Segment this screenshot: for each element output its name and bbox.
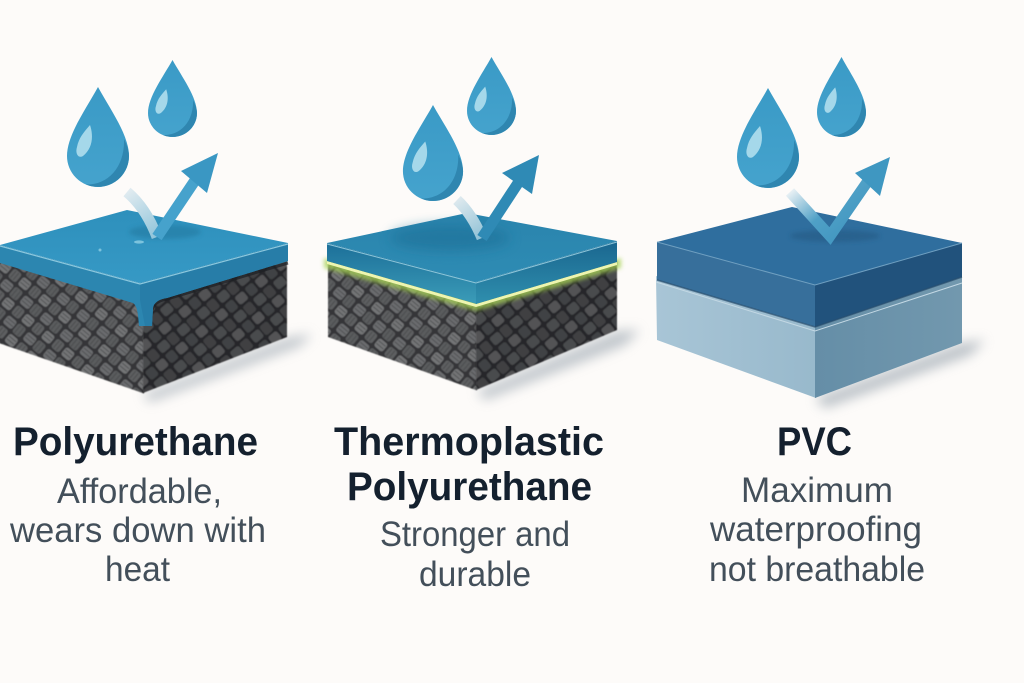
text: description: Stronger and — [380, 515, 570, 554]
heading: Thermoplastic Polyurethane — [334, 420, 604, 509]
icon: water drops — [403, 57, 516, 201]
text: description: durable — [419, 555, 531, 594]
text: description — [709, 471, 925, 589]
arrow: water deflected off surface — [457, 155, 539, 238]
text: description — [380, 515, 570, 594]
text: description — [9, 472, 266, 589]
material sample: coated woven fabric — [0, 210, 312, 402]
arrow: water deflected off surface — [790, 157, 890, 236]
icon: water drops — [67, 60, 197, 187]
panel: thermoplastic polyurethane — [324, 57, 640, 594]
text: description: Maximum — [741, 471, 893, 510]
material sample: PVC layers — [656, 207, 985, 408]
text: description: waterproofing — [709, 510, 922, 549]
material sample: bonded fabric — [324, 213, 640, 400]
text: description: not breathable — [709, 550, 925, 589]
text: description: heat — [105, 550, 170, 589]
text: description: wears down with — [9, 511, 266, 550]
heading: PVC: PVC — [777, 420, 852, 464]
heading: Thermoplastic Polyurethane: Thermoplastic — [334, 420, 604, 464]
panel: polyurethane — [0, 60, 312, 589]
icon: water drops — [737, 57, 866, 188]
text: description: Affordable, — [57, 472, 222, 511]
arrow: water deflected off surface — [127, 153, 218, 237]
heading: Polyurethane: Polyurethane — [13, 420, 258, 464]
panel: PVC — [656, 57, 985, 589]
heading: Thermoplastic Polyurethane: Polyurethane — [347, 465, 592, 509]
